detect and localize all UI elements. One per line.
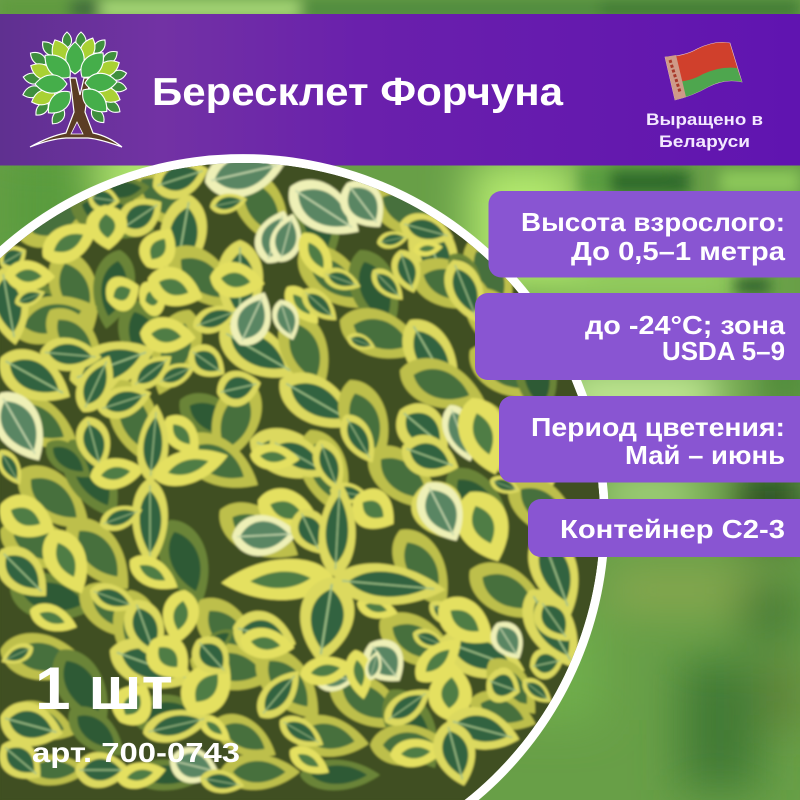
title: Бересклет Форчуна (152, 71, 563, 114)
panel: hardiness: USDA 5–9 (662, 336, 785, 366)
label: grown in Belarus (646, 110, 763, 151)
logo: tree (21, 32, 128, 147)
panel: container: Контейнер С2-3 (560, 514, 785, 544)
photo circle with variegated euonymus leaves (0, 141, 620, 800)
quantity label: 1 шт (35, 655, 173, 722)
icon: Belarus flag (665, 42, 742, 100)
panel: flowering: Май – июнь (625, 440, 785, 470)
panel: flowering: Период цветения: (531, 412, 785, 442)
panel: height (488, 191, 800, 278)
panel: height: Высота взрослого: (521, 207, 785, 237)
panel: hardiness: до -24°С; зона (585, 310, 786, 340)
article number: арт. 700-0743 (32, 737, 240, 768)
panel: height: До 0,5–1 метра (571, 236, 786, 266)
panel: container (528, 499, 800, 557)
panel: hardiness (475, 293, 800, 380)
header band (0, 14, 800, 166)
label: grown in Belarus: Беларуси (659, 132, 750, 151)
label: grown in Belarus: Выращено в (646, 110, 763, 129)
panel: flowering (499, 396, 800, 482)
